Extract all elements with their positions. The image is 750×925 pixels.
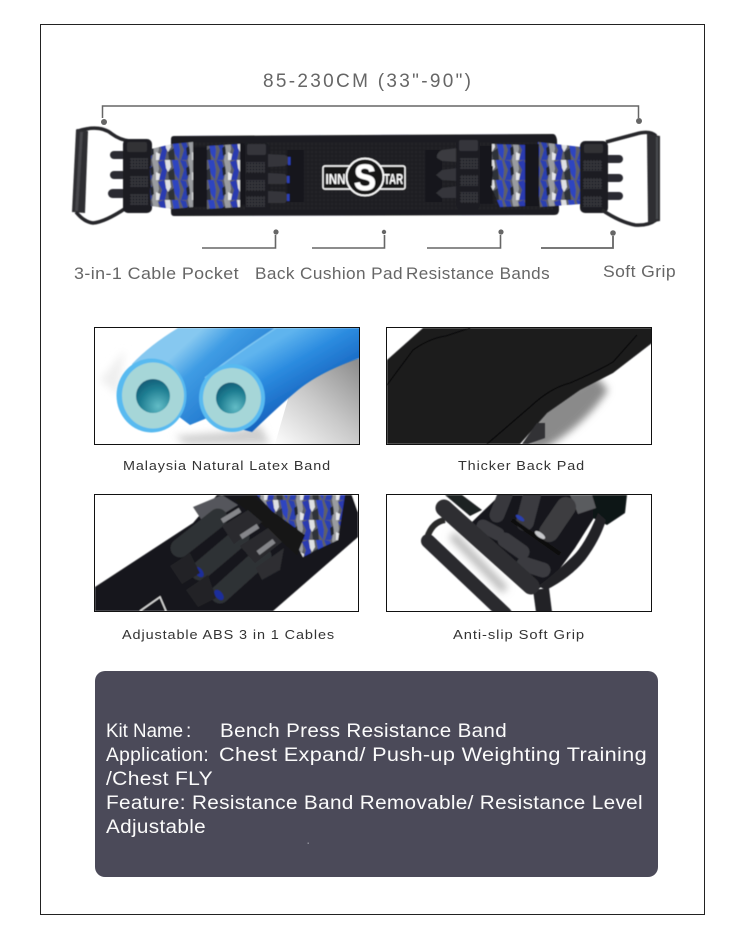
right resistance bands (491, 142, 581, 207)
spec: application: Chest Expand/ Push-up Weighting Training (219, 745, 647, 766)
right strap (525, 144, 539, 206)
photo: soft grip (386, 494, 652, 614)
callout: back cushion pad (255, 230, 403, 283)
callout: soft grip (541, 230, 676, 281)
label: Back Cushion Pad (255, 264, 403, 283)
left strap (193, 147, 207, 207)
caption: back pad: Thicker Back Pad (458, 458, 585, 473)
spec: feature (106, 793, 643, 838)
right outer connector (580, 141, 623, 213)
logo: INN STAR (323, 157, 405, 198)
caption: soft grip: Anti-slip Soft Grip (453, 627, 585, 642)
spec: kit name (106, 721, 507, 742)
spec: application: /Chest FLY (106, 769, 213, 790)
photo: back pad (386, 328, 652, 450)
left outer connector (108, 139, 152, 213)
spec: application: Application: (106, 745, 209, 766)
left handle (72, 128, 130, 223)
spec: feature: Feature: Resistance Band Removable/ Resistance Level (106, 793, 643, 814)
label: 3-in-1 Cable Pocket (74, 264, 239, 283)
product photo: resistance band with back pad (72, 128, 660, 225)
logo: INN STAR: TAR (384, 171, 403, 188)
caption: latex band: Malaysia Natural Latex Band (123, 458, 331, 473)
logo: INN STAR: INN (326, 171, 346, 188)
left resistance bands (150, 142, 240, 209)
panel: product specification (95, 671, 658, 877)
spec: kit name: Bench Press Resistance Band (220, 721, 507, 742)
spec: application (106, 745, 647, 790)
heading: length range: 85-230CM (33"-90") (263, 71, 471, 92)
label: Resistance Bands (406, 264, 550, 283)
photo: ABS cables (94, 494, 358, 612)
callout: cable pocket (74, 229, 279, 283)
right handle (602, 132, 660, 225)
photo: latex band tubes (94, 328, 360, 444)
spec: kit name: Kit Name (106, 721, 183, 742)
label: Soft Grip (603, 262, 676, 281)
callout: resistance bands (406, 229, 550, 283)
caption: ABS cables: Adjustable ABS 3 in 1 Cables (122, 627, 335, 642)
spec: kit name: : (186, 721, 191, 742)
spec: feature: Adjustable (106, 817, 206, 838)
back pad (171, 134, 559, 216)
logo: INN STAR: S (354, 157, 376, 198)
right inner connector (425, 139, 493, 209)
dimension bracket (101, 106, 642, 125)
left inner connector (240, 143, 304, 213)
